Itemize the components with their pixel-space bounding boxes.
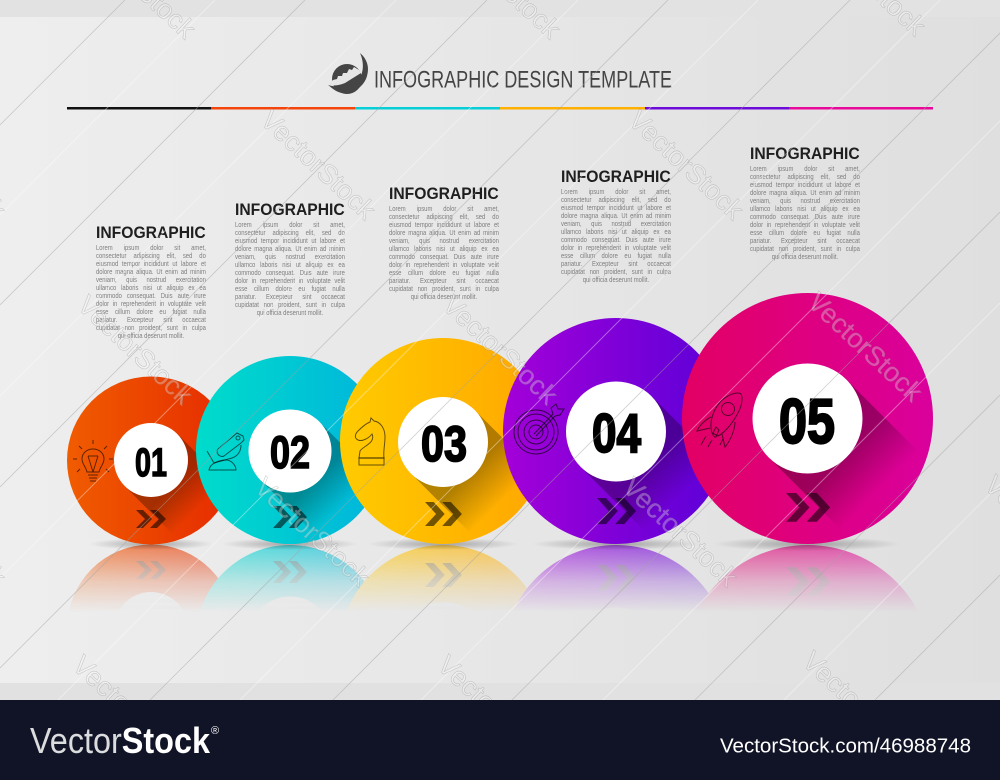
text block 01: ullamco laboris nisi ut aliquip ex ea bbox=[96, 283, 206, 292]
watermarks: VectorStock bbox=[802, 287, 929, 408]
number badge bbox=[566, 382, 666, 482]
text block 05: veniam, quis nostrud exercitation bbox=[750, 196, 860, 205]
number badge bbox=[114, 423, 188, 497]
number badge: 02 bbox=[270, 427, 310, 478]
text block 01: Lorem ipsum dolor sit amet, bbox=[96, 243, 206, 252]
text block 02: dolor in reprehenderit in voluptate velit bbox=[235, 276, 345, 285]
colored rule bbox=[67, 107, 933, 110]
icon: logo bbox=[328, 53, 368, 94]
watermarks: VectorStock bbox=[249, 472, 376, 593]
step 01 circle bbox=[67, 376, 218, 544]
text block 03 bbox=[389, 185, 499, 301]
reflection 02 bbox=[202, 545, 364, 608]
number badge: 05 bbox=[779, 387, 835, 457]
text block 04: dolore magna aliqua. Ut enim ad minim bbox=[561, 211, 671, 220]
step 03 circle bbox=[340, 338, 527, 544]
text block 03: INFOGRAPHIC bbox=[389, 185, 499, 203]
text block 04: veniam, quis nostrud exercitation bbox=[561, 219, 671, 228]
text block 03: pariatur. Excepteur sint occaecat bbox=[389, 276, 499, 285]
text block 04: consectetur adipiscing elit, sed do bbox=[561, 195, 671, 204]
text block 02: esse cillum dolore eu fugiat nulla bbox=[235, 284, 345, 293]
chevrons bbox=[273, 506, 307, 528]
text block 03: consectetur adipiscing elit, sed do bbox=[389, 212, 499, 221]
reflection 05 bbox=[702, 545, 916, 608]
text block 05: cupidatat non proident, sunt in culpa bbox=[750, 244, 860, 253]
number badge: 04 bbox=[592, 402, 641, 464]
step 04 circle bbox=[503, 318, 708, 544]
text block 04: esse cillum dolore eu fugiat nulla bbox=[561, 251, 671, 260]
watermarks: VectorStock bbox=[67, 650, 194, 771]
text block 05: dolore magna aliqua. Ut enim ad minim bbox=[750, 188, 860, 197]
text block 01: cupidatat non proident, sunt in culpa bbox=[96, 323, 206, 332]
text block 03: esse cillum dolore eu fugiat nulla bbox=[389, 268, 499, 277]
watermarks: VectorStock bbox=[72, 290, 199, 411]
reflection 01 bbox=[70, 544, 218, 608]
icon: light bulb bbox=[73, 440, 113, 481]
text block 02: commodo consequat. Duis aute irure bbox=[235, 268, 345, 277]
number badge bbox=[398, 397, 488, 487]
reflection 03 bbox=[348, 545, 527, 608]
text block 02: pariatur. Excepteur sint occaecat bbox=[235, 292, 345, 301]
text block 05: qui officia deserunt mollit. bbox=[772, 252, 838, 261]
text block 02: dolore magna aliqua. Ut enim ad minim bbox=[235, 244, 345, 253]
number badge bbox=[752, 364, 862, 474]
text block 04 bbox=[561, 168, 671, 284]
watermarks: VectorStock bbox=[623, 105, 750, 226]
text block 03: veniam, quis nostrud exercitation bbox=[389, 236, 499, 245]
text block 05: esse cillum dolore eu fugiat nulla bbox=[750, 228, 860, 237]
text block 05 bbox=[750, 145, 860, 261]
text block 05: commodo consequat. Duis aute irure bbox=[750, 212, 860, 221]
text block 03: cupidatat non proident, sunt in culpa bbox=[389, 284, 499, 293]
title with logo bbox=[328, 53, 672, 94]
text block 05: Lorem ipsum dolor sit amet, bbox=[750, 164, 860, 173]
text block 02: Lorem ipsum dolor sit amet, bbox=[235, 220, 345, 229]
watermarks: VectorStock bbox=[432, 650, 559, 771]
footer logo: VectorStock bbox=[30, 720, 211, 761]
watermarks: VectorStock bbox=[617, 472, 744, 593]
text block 04: cupidatat non proident, sunt in culpa bbox=[561, 267, 671, 276]
chevrons bbox=[597, 498, 636, 524]
icon: chess knight bbox=[355, 418, 385, 465]
ground shadows bbox=[89, 537, 901, 551]
chevrons bbox=[136, 510, 166, 528]
text block 01: INFOGRAPHIC bbox=[96, 224, 206, 242]
text block 04: pariatur. Excepteur sint occaecat bbox=[561, 259, 671, 268]
text block 03: eiusmod tempor incididunt ut labore et bbox=[389, 220, 499, 229]
text block 03: Lorem ipsum dolor sit amet, bbox=[389, 204, 499, 213]
chevrons bbox=[786, 493, 830, 522]
number badge: 01 bbox=[135, 441, 167, 485]
text block 01: pariatur. Excepteur sint occaecat bbox=[96, 315, 206, 324]
text block 03: dolore magna aliqua. Ut enim ad minim bbox=[389, 228, 499, 237]
number badge bbox=[248, 410, 332, 492]
title text: INFOGRAPHIC DESIGN TEMPLATE bbox=[374, 66, 672, 94]
icon: target bbox=[514, 404, 564, 454]
reflections bbox=[70, 544, 916, 608]
text block 04: Lorem ipsum dolor sit amet, bbox=[561, 187, 671, 196]
text block 03: commodo consequat. Duis aute irure bbox=[389, 252, 499, 261]
text block 03: dolor in reprehenderit in voluptate velit bbox=[389, 260, 499, 269]
text block 01: commodo consequat. Duis aute irure bbox=[96, 291, 206, 300]
watermarks: VectorStock bbox=[437, 290, 564, 411]
text block 04: dolor in reprehenderit in voluptate velit bbox=[561, 243, 671, 252]
text block 03: qui officia deserunt mollit. bbox=[411, 292, 477, 301]
text block 01: qui officia deserunt mollit. bbox=[118, 331, 184, 340]
text block 01: dolore magna aliqua. Ut enim ad minim bbox=[96, 267, 206, 276]
text block 05: INFOGRAPHIC bbox=[750, 145, 860, 163]
text block 05: dolor in reprehenderit in voluptate velit bbox=[750, 220, 860, 229]
registered mark: ® bbox=[211, 725, 219, 737]
text block 02: veniam, quis nostrud exercitation bbox=[235, 252, 345, 261]
text block 01 bbox=[96, 224, 206, 340]
text block 04: qui officia deserunt mollit. bbox=[583, 275, 649, 284]
text block 05: ullamco laboris nisi ut aliquip ex ea bbox=[750, 204, 860, 213]
text block 01: consectetur adipiscing elit, sed do bbox=[96, 251, 206, 260]
text block 02: consectetur adipiscing elit, sed do bbox=[235, 228, 345, 237]
text block 02: INFOGRAPHIC bbox=[235, 201, 345, 219]
text block 04: ullamco laboris nisi ut aliquip ex ea bbox=[561, 227, 671, 236]
text block 02: eiusmod tempor incididunt ut labore et bbox=[235, 236, 345, 245]
text block 02 bbox=[235, 201, 345, 317]
text block 04: commodo consequat. Duis aute irure bbox=[561, 235, 671, 244]
text block 04: eiusmod tempor incididunt ut labore et bbox=[561, 203, 671, 212]
text block 05: eiusmod tempor incididunt ut labore et bbox=[750, 180, 860, 189]
reflection 04 bbox=[516, 545, 708, 608]
text block 01: dolor in reprehenderit in voluptate velit bbox=[96, 299, 206, 308]
text block 01: esse cillum dolore eu fugiat nulla bbox=[96, 307, 206, 316]
text block 02: cupidatat non proident, sunt in culpa bbox=[235, 300, 345, 309]
text block 03: ullamco laboris nisi ut aliquip ex ea bbox=[389, 244, 499, 253]
watermarks: VectorStock bbox=[255, 105, 382, 226]
text block 01: eiusmod tempor incididunt ut labore et bbox=[96, 259, 206, 268]
footer url: VectorStock.com/46988748 bbox=[720, 736, 971, 758]
chevrons bbox=[425, 502, 462, 526]
text block 02: qui officia deserunt mollit. bbox=[257, 308, 323, 317]
text block 05: consectetur adipiscing elit, sed do bbox=[750, 172, 860, 181]
icon: rocket bbox=[697, 393, 742, 447]
step 02 circle bbox=[196, 356, 364, 544]
footer bar bbox=[0, 700, 1000, 780]
step 05 circle bbox=[682, 293, 933, 544]
text block 04: INFOGRAPHIC bbox=[561, 168, 671, 186]
text block 05: pariatur. Excepteur sint occaecat bbox=[750, 236, 860, 245]
watermarks: VectorStock bbox=[797, 646, 924, 767]
text block 02: ullamco laboris nisi ut aliquip ex ea bbox=[235, 260, 345, 269]
icon: microscope bbox=[207, 433, 244, 470]
text block 01: veniam, quis nostrud exercitation bbox=[96, 275, 206, 284]
number badge: 03 bbox=[421, 416, 467, 472]
